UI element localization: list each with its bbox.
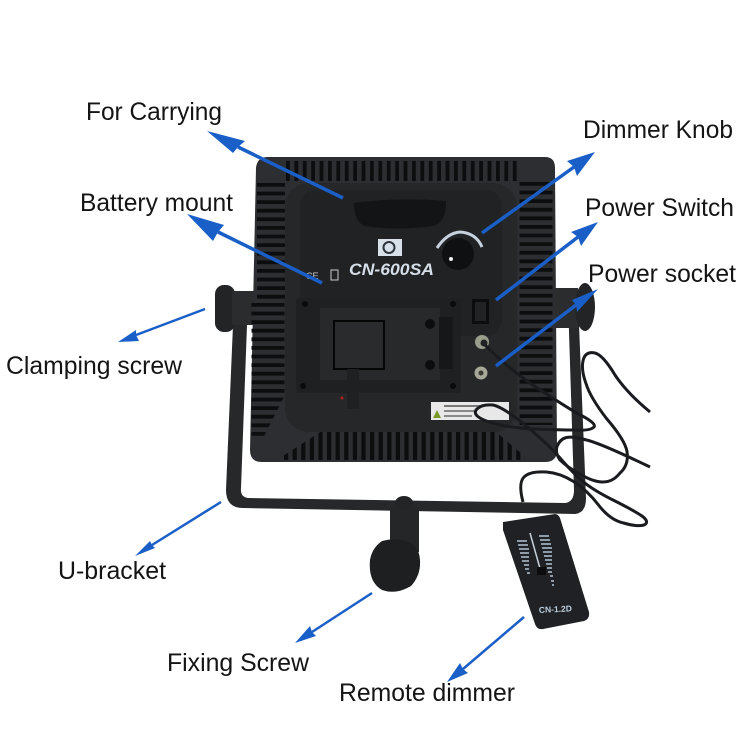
raised centre — [285, 183, 517, 432]
power switch — [472, 299, 489, 324]
model name: CN-600SA — [349, 260, 434, 279]
clamping screw right — [550, 283, 595, 331]
fixing screw — [370, 496, 420, 592]
logo — [378, 239, 402, 256]
arrow: Battery mount — [187, 214, 322, 283]
certification marks: CE — [306, 271, 319, 281]
remote model name: CN-1.2D — [539, 603, 572, 615]
arrow: U-bracket — [135, 502, 221, 556]
ribs — [268, 171, 536, 446]
corner fill — [261, 395, 285, 442]
battery plate — [296, 298, 461, 409]
arrow: Dimmer Knob — [482, 152, 595, 233]
label: Remote dimmer: Remote dimmer — [339, 679, 515, 707]
panel: light back — [250, 157, 557, 462]
label: Battery mount: Battery mount — [80, 189, 233, 217]
label: Power Switch: Power Switch — [585, 194, 734, 222]
arrow: Remote dimmer — [447, 617, 524, 682]
arrow: Fixing Screw — [295, 593, 372, 643]
label: For Carrying: For Carrying — [86, 98, 222, 126]
arrow: Power socket — [496, 289, 598, 366]
handle — [354, 199, 446, 228]
U-bracket — [226, 300, 586, 514]
slider scale — [517, 536, 554, 585]
label: Dimmer Knob: Dimmer Knob — [583, 116, 733, 144]
label: Clamping screw: Clamping screw — [6, 352, 183, 380]
clamping screw left — [215, 285, 256, 332]
remote dimmer — [503, 514, 589, 629]
label: Power socket: Power socket — [588, 260, 736, 288]
warning label — [431, 402, 509, 420]
arrow: For Carrying — [207, 131, 343, 198]
connector — [475, 335, 489, 349]
label: Fixing Screw: Fixing Screw — [167, 649, 310, 677]
arrow: Clamping screw — [118, 309, 205, 342]
cable — [475, 345, 650, 526]
power socket — [474, 366, 488, 380]
label: U-bracket: U-bracket — [58, 557, 166, 585]
arrow: Power Switch — [496, 222, 598, 300]
dimmer knob — [437, 232, 482, 270]
